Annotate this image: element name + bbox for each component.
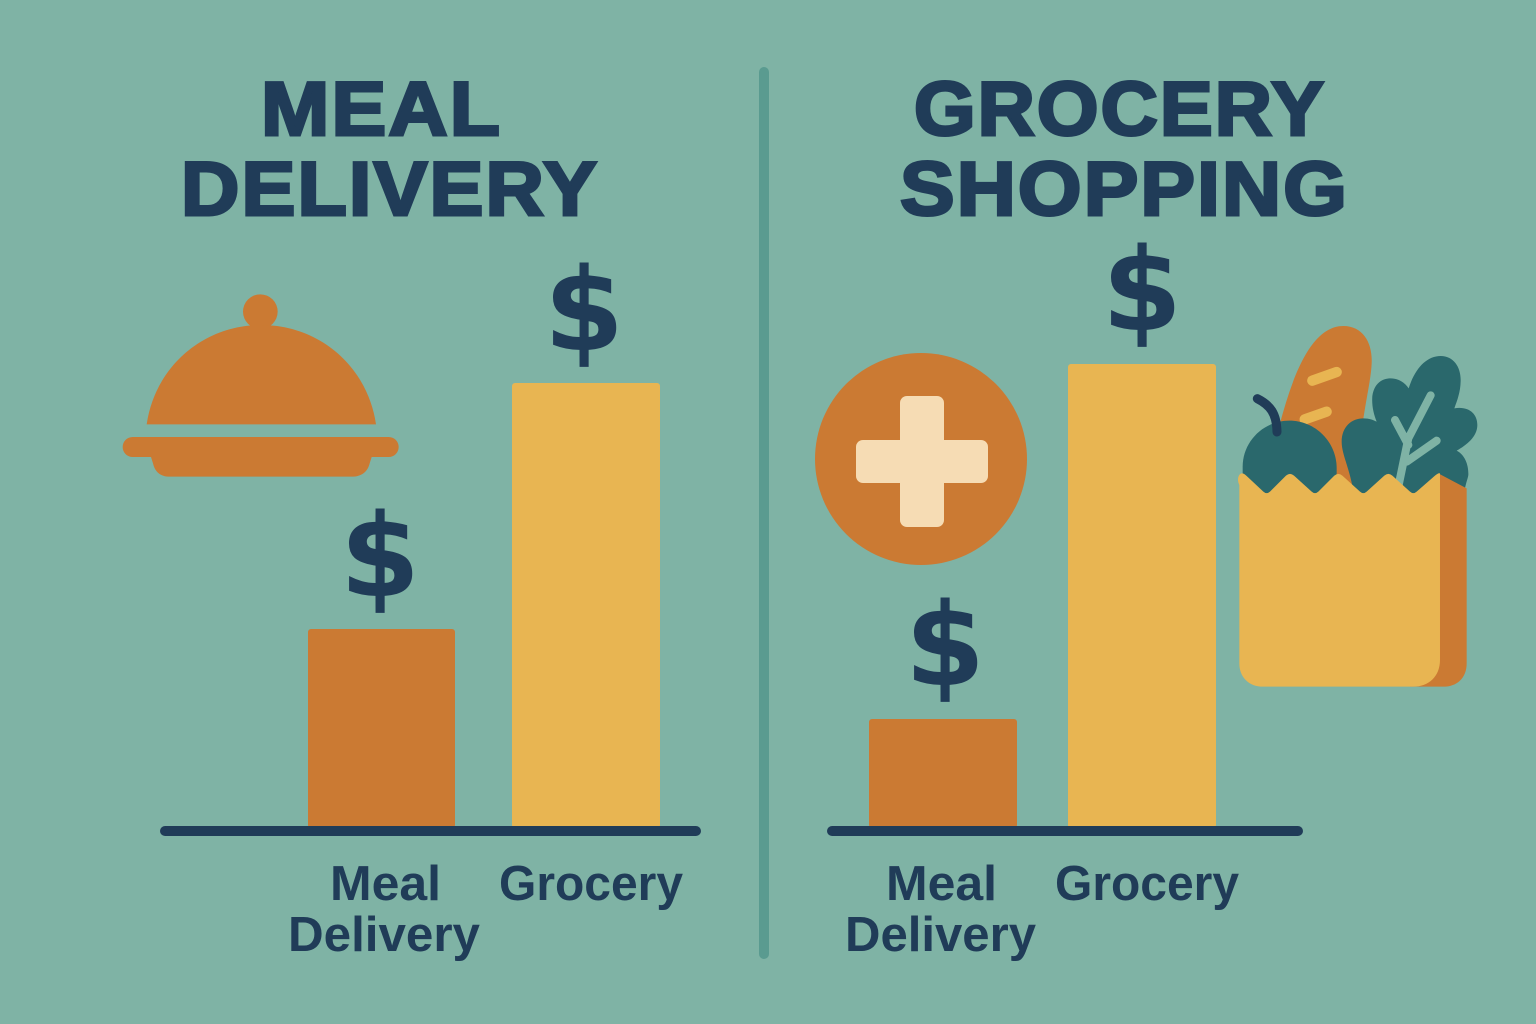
bag side	[1410, 473, 1467, 687]
bar: meal delivery cost	[308, 629, 455, 828]
title: grocery shopping: GROCERY	[914, 67, 1326, 152]
label: meal delivery	[845, 857, 1036, 962]
center divider	[759, 67, 769, 959]
bar: grocery cost	[1068, 364, 1216, 828]
bag front	[1238, 473, 1440, 687]
icon: grocery bag	[1238, 326, 1477, 687]
label: meal delivery	[288, 857, 480, 962]
label: meal delivery: Delivery	[288, 908, 480, 962]
label: meal delivery: Delivery	[845, 908, 1036, 962]
icon: covered dish cloche	[123, 294, 399, 477]
baguette	[1280, 326, 1372, 503]
panel: grocery shopping	[815, 67, 1477, 962]
title: meal delivery: DELIVERY	[181, 147, 599, 232]
bar: grocery cost	[512, 383, 660, 828]
label: grocery: Grocery	[1055, 857, 1239, 911]
panel: meal delivery	[123, 67, 701, 962]
title: meal delivery	[181, 67, 599, 232]
title: grocery shopping	[900, 67, 1349, 232]
icon: dollar sign above meal delivery bar: $	[905, 579, 985, 713]
chart axis	[827, 826, 1303, 836]
leaf veins	[1395, 395, 1437, 487]
label: grocery: Grocery	[499, 857, 683, 911]
title: meal delivery: MEAL	[261, 67, 502, 152]
icon: plus in circle	[815, 353, 1027, 565]
icon: dollar sign above grocery bar: $	[544, 244, 624, 378]
bar: meal delivery cost	[869, 719, 1017, 828]
chart axis	[160, 826, 701, 836]
apple	[1243, 421, 1337, 503]
leafy greens	[1342, 356, 1477, 503]
icon: dollar sign above grocery bar: $	[1102, 224, 1182, 358]
label: meal delivery: Meal	[330, 857, 441, 911]
icon: dollar sign above meal delivery bar: $	[340, 490, 420, 624]
title: grocery shopping: SHOPPING	[900, 147, 1349, 232]
label: meal delivery: Meal	[886, 857, 997, 911]
